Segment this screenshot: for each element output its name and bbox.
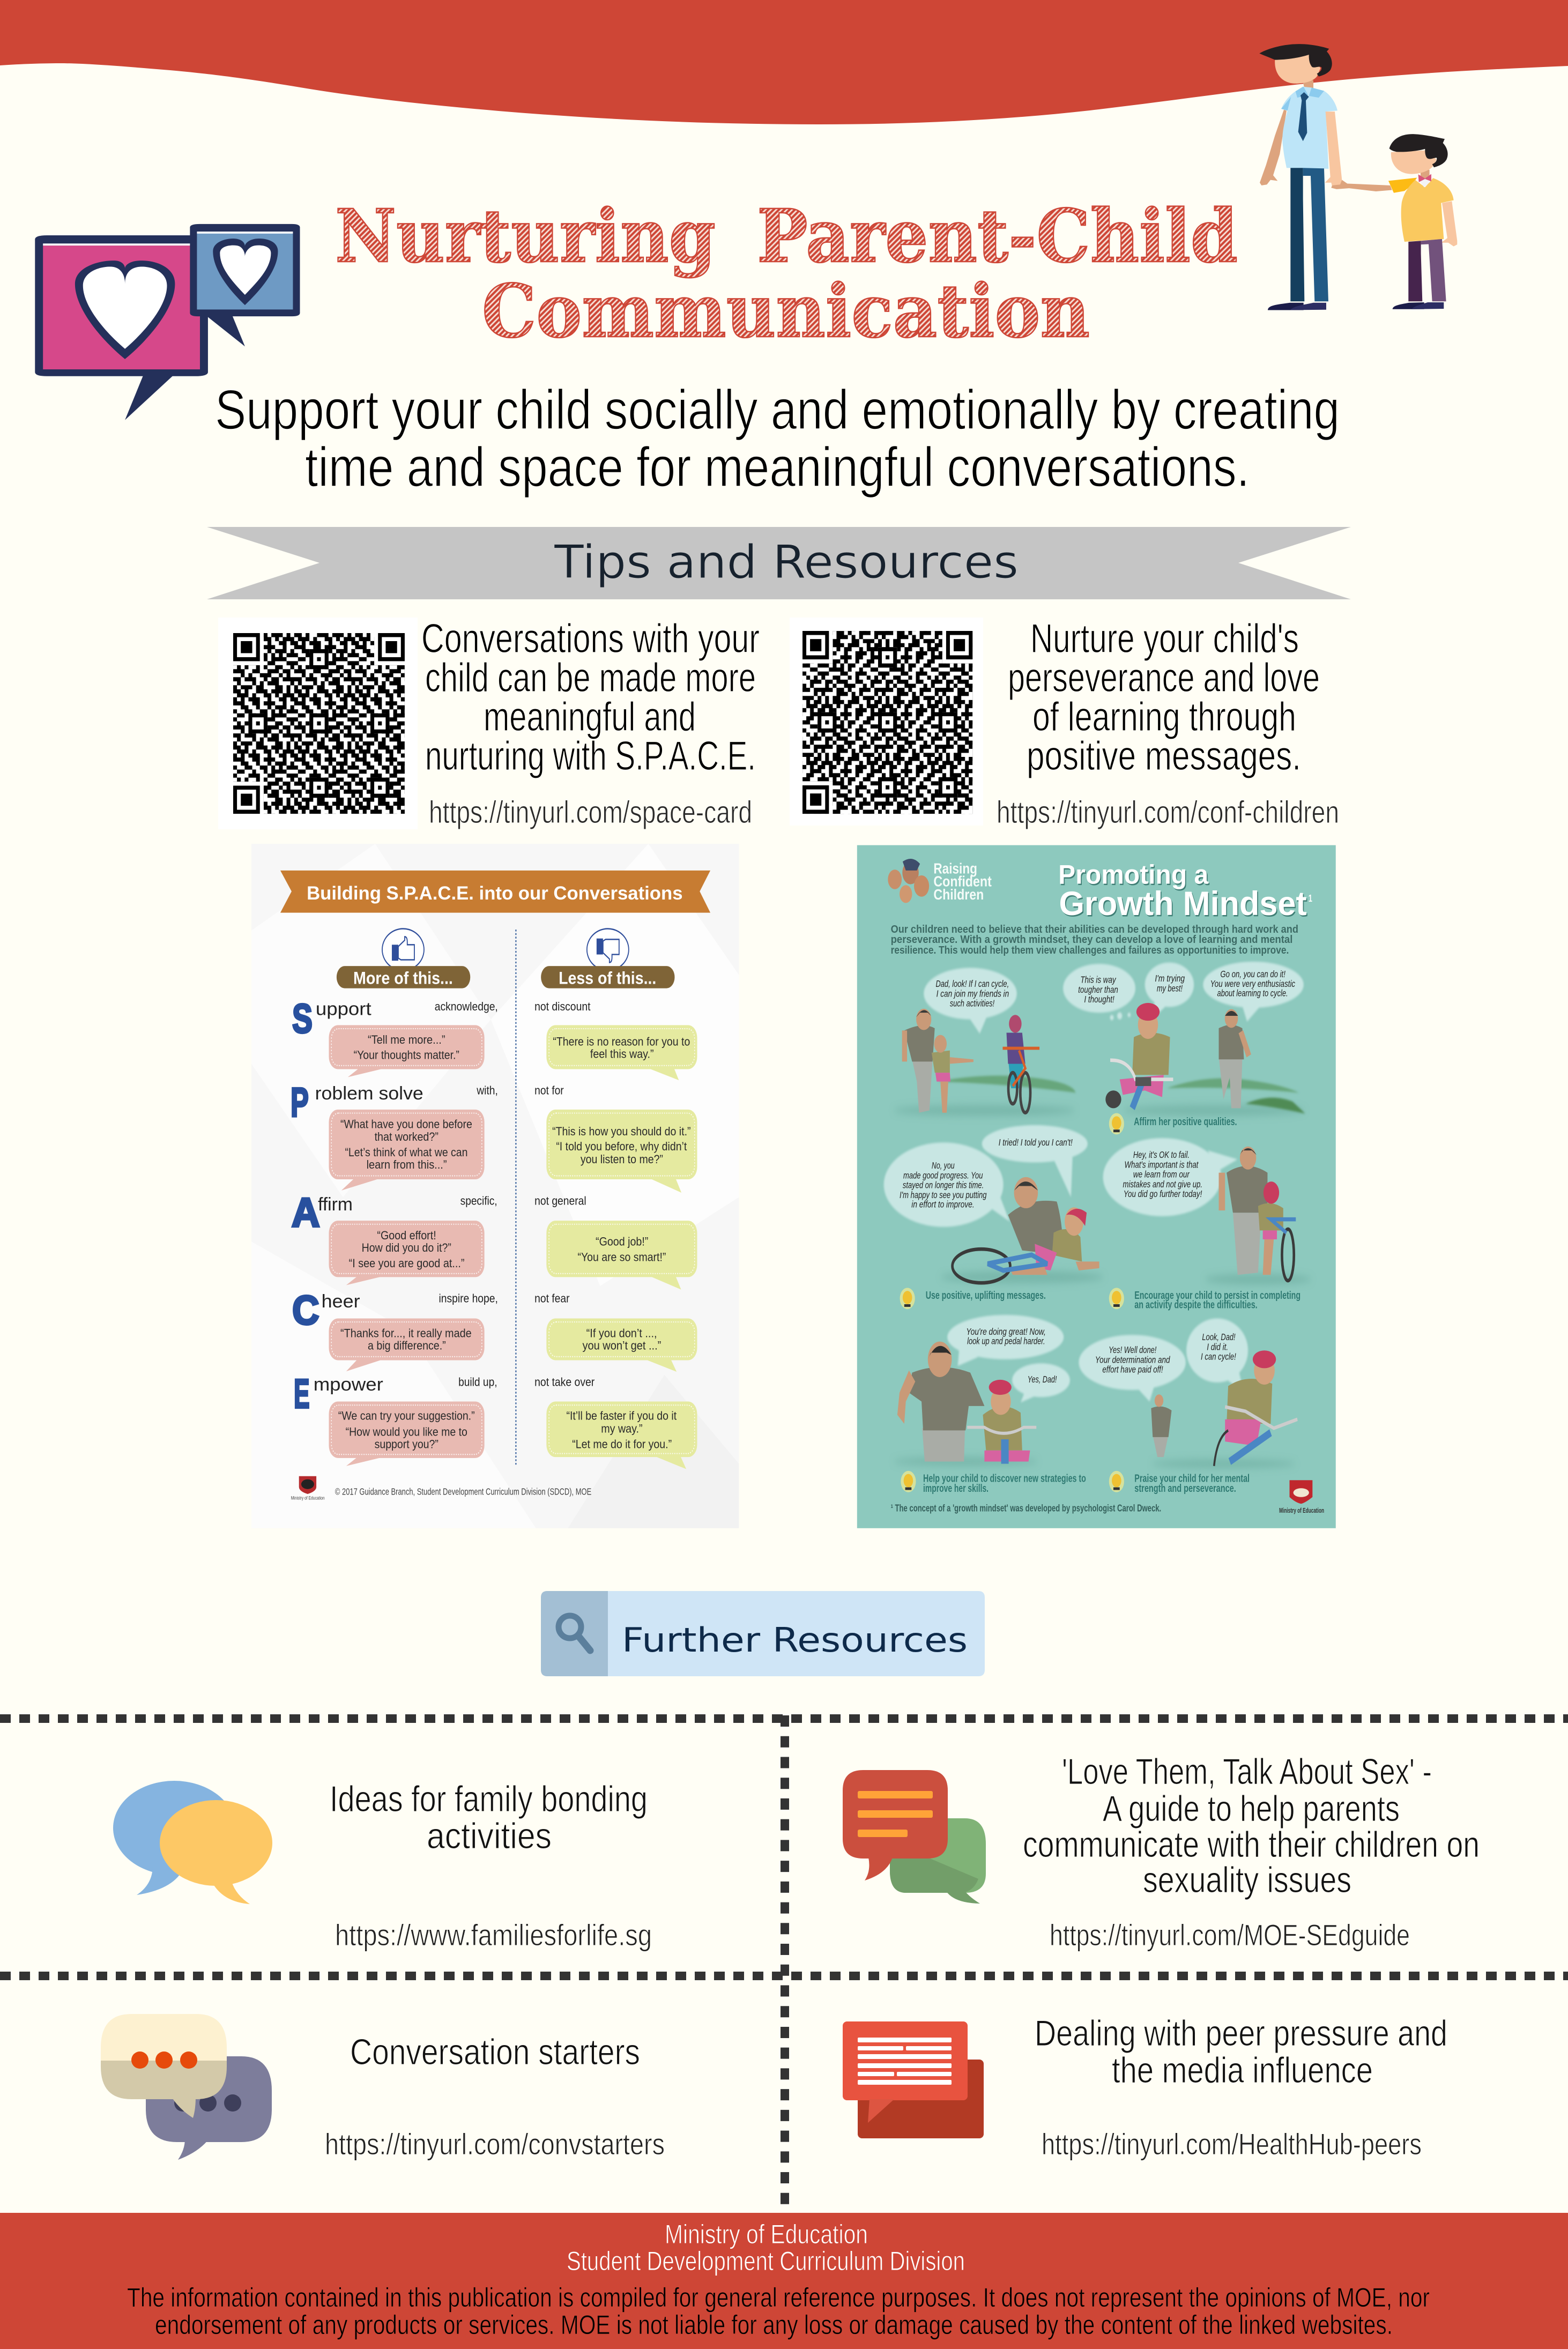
title: Communication: [482, 269, 1090, 354]
letters and words: S: [292, 997, 313, 1042]
icon: blue and yellow bubbles: [113, 1781, 272, 1904]
more of this column heading: More of this...: [353, 968, 453, 987]
captions: an activity despite the difficulties.: [1134, 1298, 1258, 1311]
subtitle: time and space for meaningful conversations.: [305, 436, 1250, 499]
bubble dialogue: look up and pedal harder.: [967, 1336, 1045, 1347]
less of this column heading: [541, 928, 675, 988]
poster logo: raising confident children: Confident: [933, 873, 992, 890]
pink speech bubbles: [329, 1025, 485, 1466]
illustration: father and son: [1259, 44, 1457, 310]
poster logo: raising confident children: Children: [933, 887, 984, 903]
text: growth mindset description: positive messages.: [1027, 733, 1301, 779]
illustration: scene 5 father running alongside: [897, 1342, 1036, 1464]
poster logo: raising confident children: Raising: [933, 860, 977, 878]
subtitle: Support your child socially and emotionally by creating: [215, 379, 1340, 441]
pink bubble quotes: “What have you done before: [340, 1118, 472, 1131]
panel: growth mindset resource link: [790, 616, 1339, 830]
bubble dialogue: Yes! Well done!: [1109, 1345, 1157, 1356]
icon: red message cards: [843, 2021, 984, 2138]
poster intro: Our children need to believe that their abilities can be developed through hard work and: [891, 923, 1298, 935]
bubble dialogue: Your determination and: [1095, 1355, 1170, 1365]
text: sexuality guide: 'Love Them, Talk About Sex' -: [1062, 1751, 1432, 1792]
yellow bubble quotes: “This is how you should do it.”: [552, 1125, 691, 1139]
text: growth mindset description: perseverance and love: [1008, 655, 1320, 701]
bubble dialogue: such activities!: [950, 999, 995, 1009]
yellow bubble quotes: you won’t get ...”: [582, 1339, 661, 1352]
poster: building S.P.A.C.E. into our conversations: not for: [534, 1084, 564, 1097]
ribbon heading: Building S.P.A.C.E. into our Conversations: [307, 883, 683, 904]
pink bubble quotes: “How would you like me to: [346, 1425, 467, 1439]
text: sexuality guide: [1023, 1751, 1480, 1900]
banner: tips and resources: [207, 527, 1351, 599]
bubble dialogue: about learning to cycle.: [1217, 988, 1288, 999]
icon: heart speech bubbles: [35, 224, 300, 420]
yellow bubble quotes: “You are so smart!”: [577, 1251, 666, 1264]
link: MOE sexuality guide: https://tinyurl.com/MOE-SEdguide: [1050, 1918, 1410, 1952]
bubble dialogue: I can cycle!: [1201, 1352, 1236, 1362]
icon: magnifier: [559, 1616, 590, 1651]
text: S.P.A.C.E. description: [421, 616, 760, 779]
captions: Affirm her positive qualities.: [1134, 1115, 1237, 1128]
text: S.P.A.C.E. description: nurturing with S.P.A.C.E.: [425, 733, 756, 779]
footer disclaimer: [127, 2283, 1430, 2340]
text: S.P.A.C.E. description: child can be made more: [425, 655, 756, 701]
text: family bonding: activities: [427, 1816, 552, 1856]
yellow bubble quotes: my way.”: [601, 1422, 643, 1436]
text: peer pressure: [1035, 2013, 1447, 2091]
bubble dialogue: No, you: [932, 1161, 955, 1171]
yellow bubble quotes: “I told you before, why didn’t: [556, 1140, 687, 1154]
bubble dialogue: we learn from our: [1133, 1170, 1190, 1180]
text: growth mindset description: of learning through: [1032, 694, 1296, 740]
pink bubble quotes: “I see you are good at...”: [349, 1257, 464, 1270]
bubble dialogue: Yes, Dad!: [1028, 1374, 1057, 1385]
poster: building S.P.A.C.E. into our conversations: with,: [476, 1084, 498, 1097]
header wave: [0, 0, 1568, 124]
yellow bubble quotes: you listen to me?”: [581, 1153, 663, 1166]
bubble dialogue: Dad, look! If I can cycle,: [935, 979, 1009, 990]
poster: building S.P.A.C.E. into our conversations: build up,: [458, 1376, 497, 1389]
text: sexuality guide: A guide to help parents: [1103, 1788, 1400, 1829]
banner: tips and resources: Tips and Resources: [554, 536, 1019, 589]
pink bubble quotes: “Let’s think of what we can: [345, 1146, 467, 1159]
bubble dialogue: effort have paid off!: [1102, 1365, 1163, 1375]
letters and words: P: [291, 1080, 309, 1126]
captions: [923, 1115, 1301, 1494]
further resources heading: [541, 1591, 985, 1676]
text: S.P.A.C.E. description: Conversations with your: [421, 616, 760, 661]
icon: ministry crest: [1279, 1480, 1324, 1514]
pink bubble quotes: “Your thoughts matter.”: [354, 1049, 459, 1062]
illustration: scene 2 girl struggling on bike: [1105, 1003, 1251, 1108]
yellow bubble quotes: [552, 1035, 691, 1451]
resource: family bonding: [113, 1779, 652, 1952]
illustration: scene 1 walking and cycling friend: [902, 1009, 1039, 1113]
poster: promoting a growth mindset: [857, 845, 1336, 1528]
poster: building S.P.A.C.E. into our conversations: not fear: [534, 1292, 570, 1305]
link: families for life: https://www.familiesforlife.sg: [335, 1918, 652, 1952]
captions: improve her skills.: [923, 1482, 989, 1494]
resource: love them talk about sex: [843, 1751, 1480, 1952]
further resources heading: Further Resources: [622, 1620, 968, 1660]
text: peer pressure: the media influence: [1112, 2050, 1373, 2091]
poster: building S.P.A.C.E. into our conversations: upport: [316, 999, 372, 1019]
bubble dialogue: [900, 969, 1295, 1385]
icon: ministry crest: [291, 1476, 325, 1501]
letters and words: E: [294, 1372, 310, 1417]
poster: building S.P.A.C.E. into our conversations: [251, 844, 739, 1528]
captions: Praise your child for her mental: [1134, 1472, 1250, 1484]
text: family bonding: Ideas for family bonding: [330, 1779, 648, 1819]
text: sexuality guide: communicate with their children on: [1023, 1824, 1480, 1865]
icons: bee bulbs: [900, 1113, 1124, 1492]
poster: building S.P.A.C.E. into our conversations: roblem solve: [315, 1083, 423, 1104]
captions: strength and perseverance.: [1134, 1482, 1236, 1494]
pink bubble quotes: learn from this...”: [367, 1158, 447, 1172]
link: health hub peers: https://tinyurl.com/HealthHub-peers: [1042, 2127, 1422, 2161]
poster: building S.P.A.C.E. into our conversations: acknowledge,: [435, 1000, 498, 1014]
poster intro: perseverance. With a growth mindset, they can develop a love of learning and mental: [891, 933, 1292, 946]
bubble dialogue: I'm happy to see you putting: [900, 1190, 987, 1200]
bubble dialogue: Look, Dad!: [1202, 1332, 1236, 1343]
poster: building S.P.A.C.E. into our conversations: heer: [322, 1291, 360, 1312]
bubble dialogue: You were very enthusiastic: [1210, 979, 1295, 990]
poster: building S.P.A.C.E. into our conversations: inspire hope,: [439, 1292, 498, 1305]
ribbon heading: [280, 871, 710, 913]
less of this column heading: Less of this...: [559, 968, 656, 987]
pink bubble quotes: support you?”: [375, 1438, 439, 1451]
speech bubbles: [884, 962, 1304, 1402]
poster: building S.P.A.C.E. into our conversations: ffirm: [318, 1194, 353, 1215]
pink bubble quotes: that worked?”: [375, 1130, 439, 1144]
letters and words: A: [292, 1190, 320, 1236]
poster title: Growth Mindset: [1060, 886, 1308, 924]
pink bubble quotes: [338, 1034, 475, 1451]
poster: building S.P.A.C.E. into our conversations: not general: [534, 1194, 586, 1208]
title: Nurturing: [335, 194, 716, 279]
bubble dialogue: You did go further today!: [1124, 1189, 1202, 1200]
QR code: space card: [218, 618, 418, 829]
bubble dialogue: What's important is that: [1124, 1159, 1199, 1170]
illustration: scene 4 father guides girl: [1219, 1147, 1296, 1281]
bubble dialogue: This is way: [1080, 975, 1117, 985]
resource: conversation starters: [101, 2014, 665, 2161]
title: [335, 194, 1238, 354]
poster title: Promoting a: [1059, 861, 1210, 891]
bubble dialogue: made good progress. You: [903, 1170, 983, 1181]
icon: ministry crest: Ministry of Education: [1279, 1507, 1324, 1514]
poster title: Growth Mindset: [1059, 884, 1307, 923]
illustration: scene 3 fallen girl and father: [953, 1177, 1099, 1283]
subtitle: [215, 379, 1340, 499]
text: family bonding: [330, 1779, 648, 1856]
poster title: [1058, 860, 1312, 924]
bubble dialogue: I thought!: [1084, 994, 1114, 1005]
ground shadows: [893, 1105, 1312, 1468]
footer organisation: [567, 2219, 965, 2276]
yellow bubble quotes: “It’ll be faster if you do it: [567, 1409, 677, 1423]
panel: S.P.A.C.E. resource link: [218, 616, 760, 830]
poster: building S.P.A.C.E. into our conversations: specific,: [460, 1194, 497, 1208]
bubble dialogue: tougher than: [1078, 985, 1118, 995]
pink bubble quotes: “Thanks for..., it really made: [340, 1327, 472, 1340]
illustration: hills: [937, 1076, 1305, 1113]
yellow speech bubbles: [546, 1025, 697, 1469]
resource: peer pressure and media: [843, 2013, 1447, 2161]
text: growth mindset description: [1008, 616, 1320, 779]
icon: ministry crest: Ministry of Education: [291, 1496, 325, 1501]
link: conversation starters: https://tinyurl.com/convstarters: [325, 2127, 665, 2161]
bubble dialogue: I tried! I told you I can't!: [999, 1138, 1073, 1148]
bubble dialogue: in effort to improve.: [911, 1199, 975, 1210]
text: sexuality guide: sexuality issues: [1143, 1860, 1351, 1900]
poster: building S.P.A.C.E. into our conversations: not take over: [534, 1376, 595, 1389]
icon: red and green bubbles: [843, 1770, 986, 1904]
pink bubble quotes: “We can try your suggestion.”: [338, 1409, 475, 1423]
text: growth mindset description: Nurture your child's: [1030, 616, 1299, 661]
bubble dialogue: mistakes and not give up.: [1123, 1179, 1202, 1190]
captions: Use positive, uplifting messages.: [926, 1289, 1046, 1302]
yellow bubble quotes: “Good job!”: [596, 1235, 648, 1248]
title: Parent-Child: [757, 194, 1238, 279]
footer: [0, 2213, 1568, 2349]
yellow bubble quotes: “There is no reason for you to: [553, 1035, 690, 1049]
text: conversation starters: Conversation starters: [350, 2032, 640, 2072]
pink bubble quotes: “Tell me more...”: [368, 1034, 445, 1047]
poster: building S.P.A.C.E. into our conversations: not discount: [534, 1000, 591, 1014]
pink bubble quotes: “Good effort!: [377, 1229, 436, 1243]
poster intro: resilience. This would help them view challenges and failures as opportunities to improve.: [891, 943, 1289, 956]
poster logo: raising confident children: [888, 859, 992, 903]
letters and words: [291, 997, 320, 1417]
poster title: 1: [1309, 894, 1312, 904]
poster title: Promoting a: [1058, 860, 1209, 890]
bubble dialogue: You're doing great! Now,: [966, 1327, 1046, 1337]
bubble dialogue: Hey, it's OK to fail.: [1133, 1150, 1190, 1161]
footer organisation: Student Development Curriculum Division: [567, 2246, 965, 2276]
link: confident children: https://tinyurl.com/conf-children: [997, 795, 1339, 830]
yellow bubble quotes: feel this way.”: [590, 1047, 654, 1061]
yellow bubble quotes: “Let me do it for you.”: [572, 1438, 672, 1451]
pink bubble quotes: a big difference.”: [368, 1339, 446, 1352]
footnote: ¹ The concept of a 'growth mindset' was developed by psychologist Carol Dweck.: [891, 1503, 1161, 1514]
text: peer pressure: Dealing with peer pressure and: [1035, 2013, 1447, 2054]
bubble dialogue: my best!: [1157, 983, 1183, 994]
QR code: confident children: [790, 618, 983, 826]
link: space card: https://tinyurl.com/space-card: [429, 795, 752, 830]
poster: building S.P.A.C.E. into our conversations: mpower: [314, 1374, 383, 1395]
more of this column heading: [337, 928, 470, 988]
bubble dialogue: I can join my friends in: [937, 988, 1009, 999]
icon: cream and slate bubbles: [101, 2014, 272, 2160]
letters and words: C: [292, 1288, 319, 1333]
bubble dialogue: I'm trying: [1155, 973, 1185, 984]
footer organisation: Ministry of Education: [665, 2219, 868, 2249]
bubble dialogue: I did it.: [1207, 1342, 1228, 1352]
illustration: scene 6 girl cycling alone: [1151, 1350, 1297, 1466]
bubble dialogue: Go on, you can do it!: [1220, 969, 1286, 979]
yellow bubble quotes: “If you don’t ...,: [586, 1327, 657, 1340]
text: S.P.A.C.E. description: meaningful and: [484, 694, 696, 740]
copyright line: © 2017 Guidance Branch, Student Development Curriculum Division (SDCD), MOE: [335, 1487, 591, 1497]
captions: Help your child to discover new strategies to: [923, 1472, 1086, 1484]
pink bubble quotes: How did you do it?”: [362, 1242, 451, 1255]
bubble dialogue: stayed on longer this time.: [903, 1180, 984, 1191]
captions: Encourage your child to persist in completing: [1134, 1289, 1301, 1302]
poster intro: [891, 923, 1298, 956]
